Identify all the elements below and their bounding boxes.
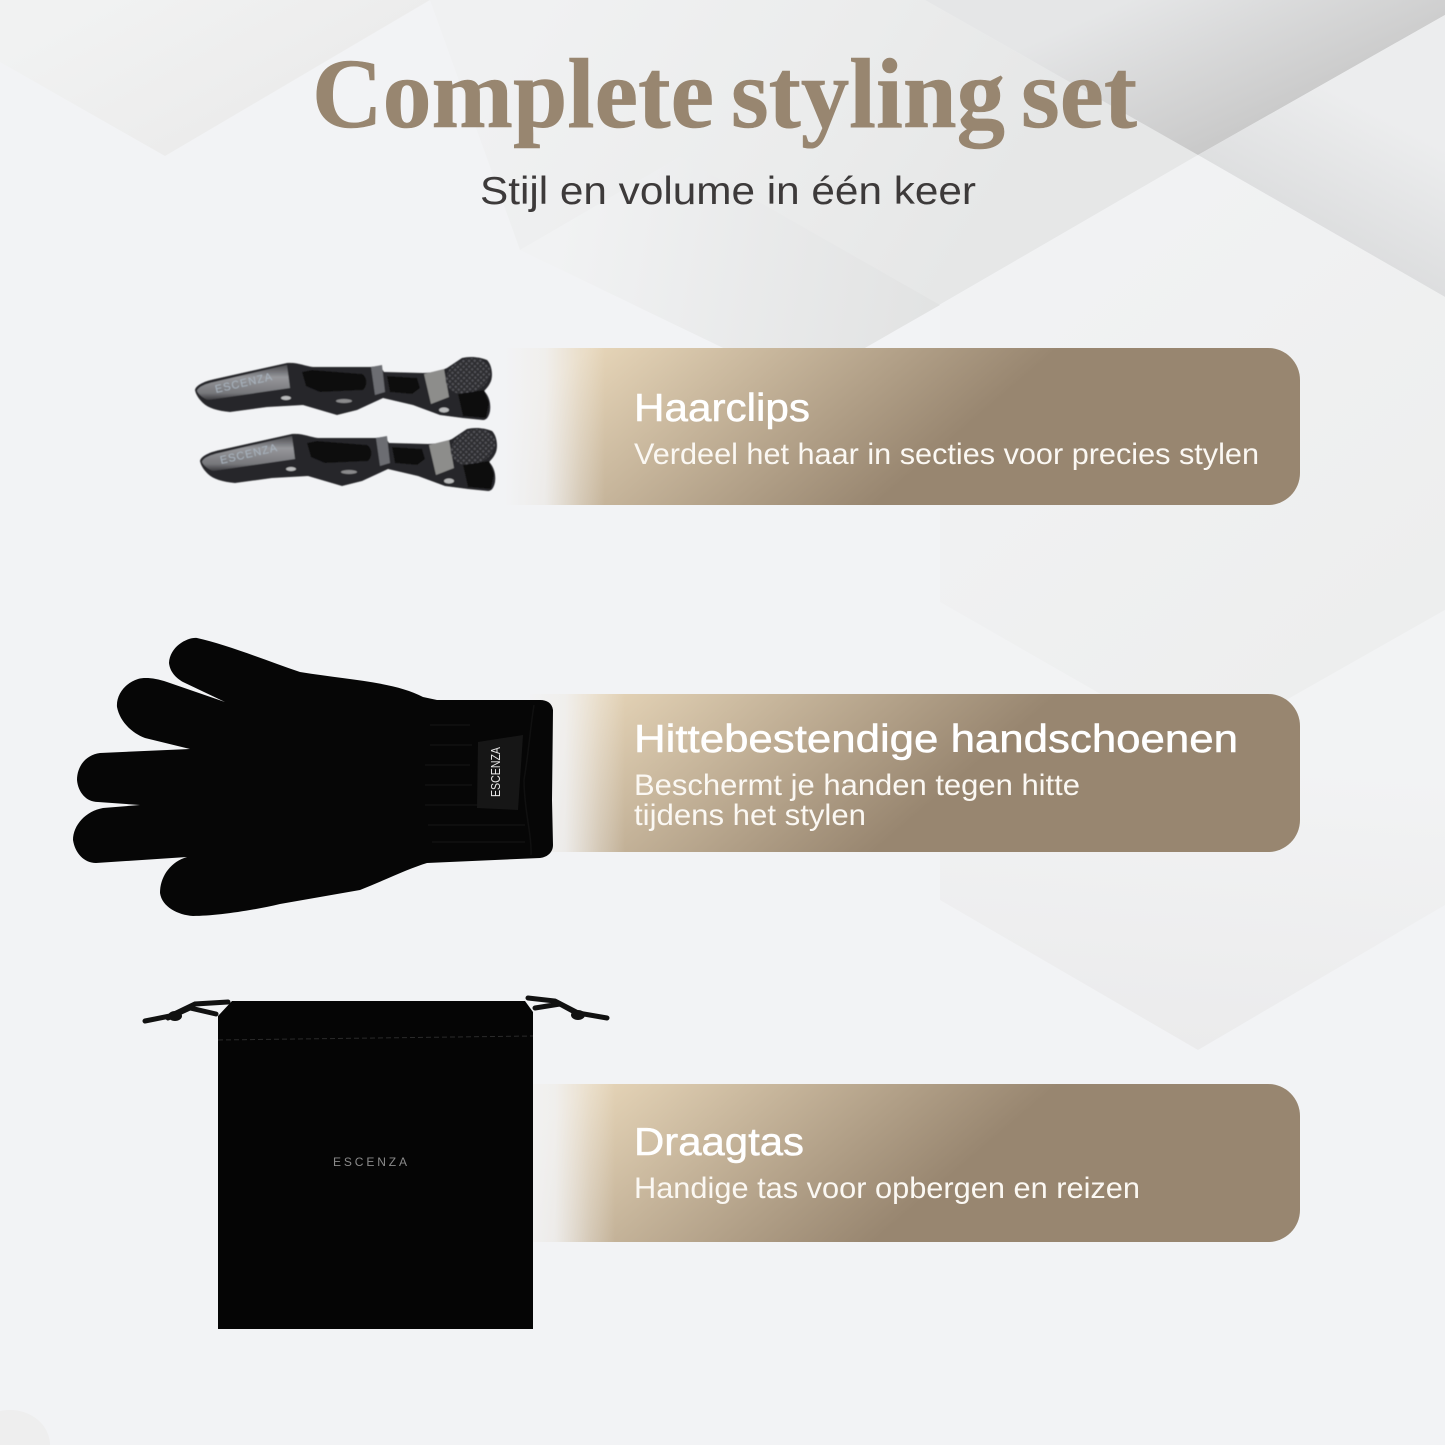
bag body [218,1001,533,1329]
title: Complete [312,38,714,149]
icon: lower clip: ESCENZA [219,442,279,467]
icon: hair clips [195,352,501,491]
subtitle: Stijl en volume in één keer [480,170,976,213]
panel: draagtas [515,1084,1300,1242]
icon: right drawstring [528,998,607,1020]
text: handschoenen description [634,769,1080,832]
icon: left drawstring [145,1002,228,1021]
text: draagtas description: Handige tas voor opbergen en reizen [634,1172,1140,1205]
heading: handschoenen: Hittebestendige handschoenen [634,718,1238,761]
heading: draagtas: Draagtas [634,1121,804,1164]
icon: black drawstring bag [145,998,607,1329]
panel: hittebestendige handschoenen [525,694,1300,852]
heading: haarclips: Haarclips [634,387,810,430]
glove label [477,735,523,810]
title: set [1021,38,1137,149]
icon: upper clip [195,352,496,420]
icon: black glove [73,638,553,916]
title [312,38,1137,149]
icon: lower clip [200,423,501,491]
glove label: ESCENZA [489,746,503,797]
panel: haarclips [480,348,1300,505]
title: styling [731,38,1005,149]
bag logo: ESCENZA [333,1155,407,1169]
text: handschoenen description: Beschermt je handen tegen hitte [634,769,1080,802]
icon: upper clip: ESCENZA [214,371,274,396]
text: handschoenen description: tijdens het stylen [634,799,866,832]
text: haarclips description: Verdeel het haar in secties voor precies stylen [634,438,1259,471]
